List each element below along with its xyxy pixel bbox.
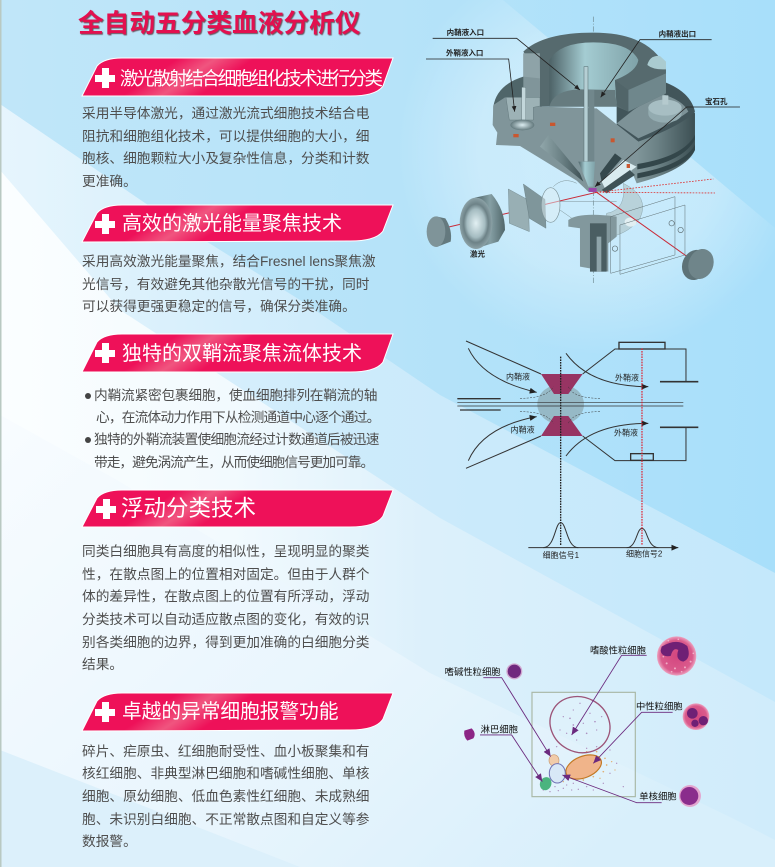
lens outline xyxy=(541,181,617,222)
text: section 2: 可以获得更强更稳定的信号，确保分类准确。 xyxy=(82,299,356,314)
neutrophil halo dots xyxy=(563,751,616,782)
laser lens xyxy=(460,194,505,249)
text: section 3 bullets: 心，在流体动力作用下从检测通道中心逐个通过。 xyxy=(96,410,380,425)
banner: section 1 heading: 激光散射结合细胞组化技术进行分类 xyxy=(120,68,381,88)
O-rings xyxy=(513,123,630,168)
labels xyxy=(446,27,728,259)
banner: section 5 heading: 卓越的异常细胞报警功能 xyxy=(122,701,339,723)
inner channels xyxy=(523,53,637,193)
text: section 5: 数报警。 xyxy=(82,834,137,849)
text: section 5: 碎片、疟原虫、红细胞耐受性、血小板聚集和有 xyxy=(82,744,369,758)
inlet chamber xyxy=(506,87,540,130)
text: section 2: 光信号，有效避免其他杂散光信号的干扰，同时 xyxy=(82,277,369,292)
center axis xyxy=(592,17,594,283)
lower flange xyxy=(493,77,695,183)
collection mirror xyxy=(600,183,643,238)
labels: 激光 xyxy=(470,249,485,259)
inner well xyxy=(549,42,638,107)
text: section 1: 阻抗和细胞组化技术，可以提供细胞的大小，细 xyxy=(82,129,369,144)
text: section 4: 同类白细胞具有高度的相似性，呈现明显的聚类 xyxy=(82,544,369,559)
labels: 单核细胞 xyxy=(639,791,677,802)
title: 全自动五分类血液分析仪 xyxy=(78,10,361,38)
labels: 内鞘液 xyxy=(511,425,535,435)
text: section 4: 体的差异性，在散点图上的位置有所浮动，浮动 xyxy=(82,589,369,604)
lymphocyte gate xyxy=(538,775,553,792)
prism blocks xyxy=(508,184,546,232)
knob xyxy=(648,95,682,123)
text: section 3 bullets: 内鞘流紧密包裹细胞，使血细胞排列在鞘流的轴 xyxy=(94,388,377,403)
flow lines xyxy=(457,341,698,548)
text: section 5: 核红细胞、非典型淋巴细胞和嗜碱性细胞、单核 xyxy=(82,766,369,781)
labels: 内鞘液入口 xyxy=(447,27,484,37)
text: section 4: 别各类细胞的边界，得到更加准确的白细胞分类 xyxy=(82,635,369,650)
detector xyxy=(678,245,718,284)
banner: section 3 heading xyxy=(82,334,394,372)
lower block xyxy=(568,215,617,272)
scatter dots xyxy=(543,703,624,792)
banner: section 2 heading: 高效的激光能量聚焦技术 xyxy=(122,213,342,235)
front block xyxy=(615,73,666,112)
cell images xyxy=(464,636,709,807)
labels: 外鞘液入口 xyxy=(446,48,483,58)
diagram: flow chamber cutaway xyxy=(426,17,740,284)
banner: section 2 heading xyxy=(81,204,394,242)
banner: section 5 heading xyxy=(82,692,394,732)
mirror spot xyxy=(625,217,637,227)
text: section 1 xyxy=(82,106,369,189)
diagram: dual sheath flow xyxy=(457,341,698,560)
labels: 内鞘液出口 xyxy=(659,29,696,39)
jewel orifice xyxy=(589,188,597,192)
neutrophil gate xyxy=(562,750,605,784)
labels: 嗜酸性粒细胞 xyxy=(590,644,646,655)
arrows xyxy=(480,655,673,803)
well bottom xyxy=(549,89,617,107)
banner: section 4 heading xyxy=(82,490,394,528)
text: section 3 bullets: 带走，避免涡流产生，从而使细胞信号更加可靠。 xyxy=(94,455,373,470)
labels: 细胞信号2 xyxy=(626,549,663,559)
text: section 1: 采用半导体激光，通过激光流式细胞技术结合电 xyxy=(82,106,369,121)
labels: 嗜碱性粒细胞 xyxy=(445,666,501,677)
monocyte gate xyxy=(549,764,565,783)
laser beam xyxy=(433,192,697,263)
sensing zone xyxy=(537,384,584,424)
scattered beams xyxy=(597,179,715,193)
text: section 5: 细胞、原幼细胞、低血色素性红细胞、未成熟细 xyxy=(82,789,369,804)
side hole xyxy=(647,56,666,69)
labels: 内鞘液 xyxy=(506,371,530,381)
labels: 淋巴细胞 xyxy=(481,724,518,735)
text: section 5: 胞、未识别白细胞、不正常散点图和自定义等参 xyxy=(82,812,369,827)
labels: 中性粒细胞 xyxy=(636,700,683,711)
text: section 1: 胞核、细胞颗粒大小及复杂性信息，分类和计数 xyxy=(82,151,369,166)
diagram: scatter plot with cell types xyxy=(445,636,709,807)
text: section 4 xyxy=(82,544,369,672)
text: section 3 bullets xyxy=(85,388,380,470)
text: section 4: 结果。 xyxy=(82,657,123,672)
text: section 5 xyxy=(82,744,369,849)
eosinophil gate xyxy=(540,686,620,763)
callout lines xyxy=(426,38,740,187)
aperture trapezoids xyxy=(541,374,583,436)
cross section xyxy=(493,53,638,192)
upper ring xyxy=(523,33,666,112)
text: section 3 bullets: 独特的外鞘流装置使细胞流经过计数通道后被迅速 xyxy=(94,432,379,447)
labels: 细胞信号1 xyxy=(543,550,580,560)
labels: 宝石孔 xyxy=(705,96,728,106)
text: section 1: 更准确。 xyxy=(82,174,137,189)
small lens xyxy=(427,216,451,247)
banner: section 1 heading xyxy=(81,58,394,96)
labels: 外鞘液 xyxy=(614,427,638,437)
text: section 4: 性，在散点图上的位置相对固定。但由于人群个 xyxy=(82,567,369,582)
text: section 4: 分类技术可以自动适应散点图的变化，有效的识 xyxy=(82,612,369,627)
text: section 2: 采用高效激光能量聚焦，结合Fresnel lens聚焦激 xyxy=(82,254,376,269)
basophil gate xyxy=(549,755,559,766)
labels xyxy=(445,644,683,802)
banner: section 3 heading: 独特的双鞘流聚焦流体技术 xyxy=(122,343,362,365)
banner: section 4 heading: 浮动分类技术 xyxy=(121,496,256,521)
labels: 外鞘液 xyxy=(615,373,639,383)
signal axis lines xyxy=(561,348,642,545)
plates xyxy=(611,197,685,274)
text: section 2 xyxy=(82,254,376,314)
labels xyxy=(506,371,663,560)
plot frame xyxy=(532,692,635,797)
